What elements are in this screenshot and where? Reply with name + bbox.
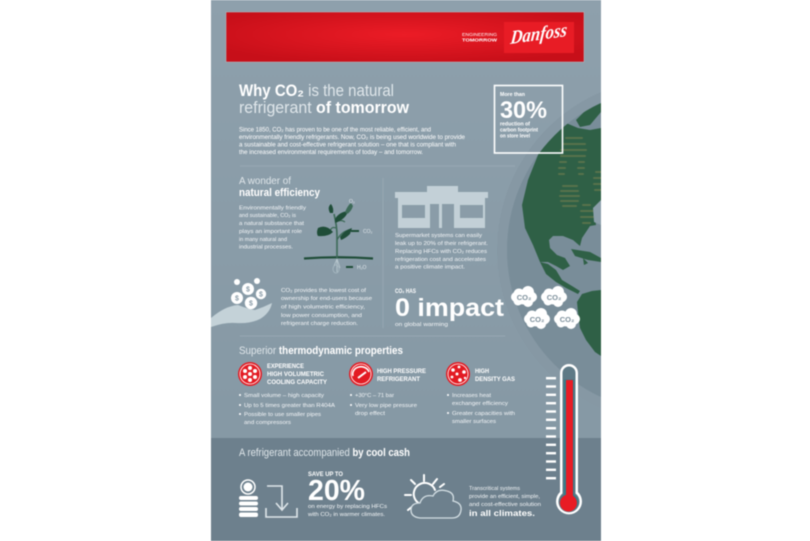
heading: cool cash: A refrigerant accompanied by cool cash (239, 447, 410, 459)
red header banner (226, 12, 584, 62)
text: supermarket leakage: refrigeration cost and accelerates (395, 257, 486, 263)
column: high density gas: exchanger efficiency (452, 401, 508, 407)
icon: molecules (446, 362, 470, 386)
globe with continents (522, 100, 601, 356)
text: cost of ownership: of high volumetric efficiency, (281, 304, 365, 310)
heading: thermodynamic properties: Superior thermodynamic properties (239, 345, 403, 357)
column: high pressure: HIGH PRESSURE (377, 369, 426, 375)
tagline (462, 32, 498, 42)
callout: 0 impact (395, 289, 505, 328)
heading: natural efficiency (239, 175, 321, 199)
Danfoss logo: Danfoss (509, 20, 568, 49)
icon: CO2 clouds: CO₂ (530, 315, 544, 324)
column: high pressure: Very low pipe pressure (355, 403, 418, 409)
column: cooling capacity: and compressors (244, 420, 291, 426)
icon: hand with coins: $ (246, 286, 250, 294)
icon: hand with coins: $ (235, 296, 239, 302)
icon: plant absorbing CO2: CO₂ (363, 229, 372, 235)
tagline: ENGINEERING (462, 32, 497, 37)
text: supermarket leakage (395, 233, 488, 270)
callout: save up to 20% (307, 472, 387, 518)
callout: 30% reduction: 30% (500, 97, 547, 124)
callout: save up to 20%: with CO₂ in warmer climates. (307, 512, 385, 518)
intro text: environmentally friendly refrigerants. Now, CO₂ is being used worldwide to provide (239, 134, 466, 141)
icon: hand with coins (211, 278, 272, 327)
text: cost of ownership: low power consumption, and (281, 313, 362, 319)
callout: save up to 20%: SAVE UP TO (308, 472, 343, 478)
intro text: a sustainable and cost-effective refrigerant solution – one that is compliant with (239, 142, 457, 148)
text: supermarket leakage: Supermarket systems can easily (395, 233, 482, 239)
icon: CO2 clouds: CO₂ (560, 315, 574, 324)
column: high density gas: HIGH (475, 369, 489, 375)
intro text: Since 1850, CO₂ has proven to be one of the most reliable, efficient, and (239, 126, 432, 134)
callout: 30% reduction: carbon footprint (500, 128, 538, 134)
column: cooling capacity (238, 362, 335, 426)
text: cost of ownership: refrigerant charge reduction. (281, 321, 358, 327)
title: Why CO₂ is the natural (239, 81, 394, 100)
icon: CO2 clouds (511, 286, 580, 329)
text: cost of ownership (281, 288, 373, 327)
text: natural efficiency: in many natural and (239, 237, 287, 243)
text: all climates: in all climates. (469, 509, 535, 518)
column: cooling capacity: HIGH VOLUMETRIC (267, 372, 325, 378)
column: cooling capacity: Possible to use smaller pipes (244, 412, 321, 418)
title (239, 81, 410, 117)
icon: hand with coins: $ (259, 292, 263, 298)
column: cooling capacity: Up to 5 times greater than R404A (244, 403, 335, 409)
footprints on the globe (559, 138, 601, 223)
column: high density gas: smaller surfaces (452, 419, 496, 425)
column: cooling capacity: Small volume – high capacity (244, 393, 324, 399)
text: supermarket leakage: Replacing HFCs with CO₂ reduces (395, 249, 487, 255)
intro text (239, 126, 466, 156)
text: natural efficiency: and sustainable, CO₂ is (239, 213, 296, 219)
column: cooling capacity: EXPERIENCE (267, 364, 304, 370)
text: cost of ownership: CO₂ provides the lowest cost of (281, 288, 366, 294)
callout: 30% reduction: reduction of (500, 122, 530, 128)
text: natural efficiency: Environmentally friendly (239, 206, 306, 212)
icon: supermarket (395, 186, 488, 228)
callout: 0 impact: CO₂ HAS (395, 289, 416, 295)
column: high density gas (446, 362, 515, 425)
column: high pressure: +30°C – 71 bar (355, 393, 394, 399)
icon: pressure gauge (349, 362, 373, 386)
text: natural efficiency: a natural substance that (239, 221, 304, 227)
text: natural efficiency: industrial processes. (239, 244, 293, 250)
icon: plant absorbing CO2: H₂O (357, 265, 367, 271)
text: all climates (469, 486, 541, 518)
callout: 30% reduction: More than (500, 92, 526, 98)
text: all climates: provide an efficient, simple, (469, 494, 540, 500)
callout: 30% reduction (494, 86, 562, 153)
heading: natural efficiency: natural efficiency (239, 187, 321, 199)
icon: coin stack (239, 480, 258, 517)
icon: plant absorbing CO2 (304, 199, 373, 273)
callout: 0 impact: 0 impact (395, 294, 505, 322)
text: all climates: and cost-effective solution (469, 502, 541, 508)
column: high density gas: Increases heat (452, 393, 491, 399)
icon: plant absorbing CO2: O₂ (349, 199, 355, 205)
icon: sun and cloud (405, 475, 461, 518)
column: cooling capacity: COOLING CAPACITY (267, 380, 327, 386)
callout: 30% reduction: on store level (500, 134, 530, 140)
column: high pressure (349, 362, 426, 417)
icon: hand with coins: $ (249, 300, 253, 308)
column: high pressure: REFRIGERANT (377, 377, 420, 383)
icon: CO2 clouds: CO₂ (547, 293, 561, 302)
text: natural efficiency: plays an important role (239, 229, 303, 235)
tagline: TOMORROW (462, 38, 498, 42)
intro text: the increased environmental requirements of today – and tomorrow. (239, 149, 423, 156)
text: supermarket leakage: leak up to 20% of their refrigerant. (395, 241, 488, 247)
title: refrigerant of tomorrow (239, 98, 410, 117)
icon: download arrow (266, 486, 297, 517)
icon: CO2 clouds: CO₂ (517, 293, 531, 302)
panel: infographic background (210, 0, 602, 541)
text: supermarket leakage: a positive climate impact. (395, 264, 465, 270)
callout: 0 impact: on global warming (395, 322, 448, 328)
callout: save up to 20%: 20% (308, 475, 365, 507)
column: high density gas: Greater capacities with (452, 411, 515, 417)
heading: natural efficiency: A wonder of (239, 175, 291, 187)
text: all climates: Transcritical systems (469, 486, 520, 492)
column: high density gas: DENSITY GAS (475, 377, 515, 383)
text: cost of ownership: ownership for end-users because (281, 296, 373, 302)
icon: snowflake (238, 362, 262, 386)
text: natural efficiency (239, 206, 306, 250)
callout: save up to 20%: on energy by replacing HFCs (308, 504, 387, 510)
column: high pressure: drop effect (355, 411, 385, 417)
icon: thermometer (546, 364, 582, 514)
